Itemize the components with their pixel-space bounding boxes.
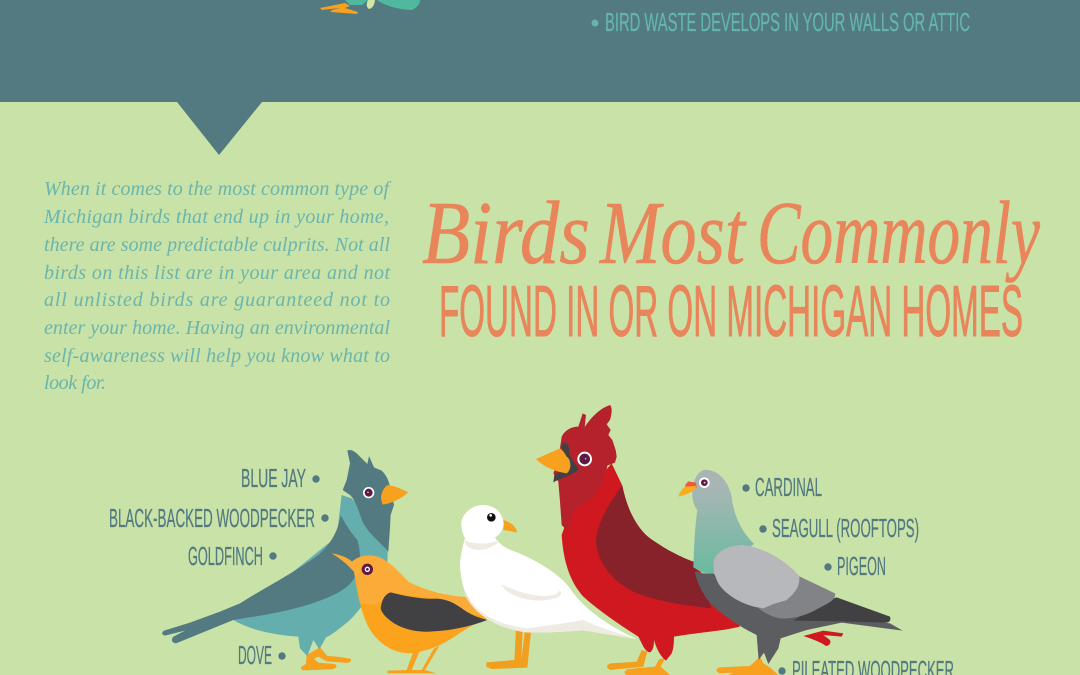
- label: Pigeon: [824, 551, 886, 581]
- label: Goldfinch: GOLDFINCH: [188, 541, 263, 571]
- label: Cardinal: [742, 472, 822, 502]
- label: Seagull: [759, 513, 919, 543]
- intro paragraph: all unlisted birds are guaranteed not to: [44, 289, 390, 311]
- bird: goldfinch: [332, 553, 489, 673]
- label: Blue Jay: BLUE JAY: [241, 463, 306, 493]
- title: script line: [422, 184, 1040, 283]
- label: Pileated Woodpecker: [778, 655, 954, 675]
- intro paragraph: [43, 178, 391, 394]
- intro paragraph: there are some predictable culprits. Not all: [44, 234, 390, 256]
- label: Dove: DOVE: [238, 640, 272, 670]
- bird: seagull: [460, 505, 637, 669]
- icon: bird fragment in banner: [320, 0, 420, 14]
- title: script line: Most: [598, 184, 747, 283]
- label: Cardinal: CARDINAL: [755, 472, 822, 502]
- intro paragraph: When it comes to the most common type of: [44, 178, 391, 200]
- bird: blue jay: [162, 450, 408, 670]
- label: Dove: [238, 640, 286, 670]
- label: Black-backed Woodpecker: [109, 503, 329, 533]
- intro paragraph: look for.: [44, 372, 106, 394]
- intro paragraph: Michigan birds that end up in your home,: [43, 206, 389, 228]
- bird: cardinal: [536, 405, 740, 675]
- label: Blue Jay: [241, 463, 320, 493]
- intro paragraph: birds on this list are in your area and not: [44, 262, 390, 284]
- top banner: [0, 0, 1080, 155]
- intro paragraph: self-awareness will help you know what to: [44, 345, 390, 367]
- bird: pigeon: [678, 470, 903, 675]
- intro paragraph: enter your home. Having an environmental: [44, 317, 390, 339]
- label: Seagull: SEAGULL (ROOFTOPS): [772, 513, 919, 543]
- text: PIGEON: [837, 551, 886, 581]
- label: Goldfinch: [188, 541, 277, 571]
- title: script line: Birds: [422, 184, 590, 283]
- label: Black-backed Woodpecker: BLACK-BACKED WOODPECKER: [109, 503, 315, 533]
